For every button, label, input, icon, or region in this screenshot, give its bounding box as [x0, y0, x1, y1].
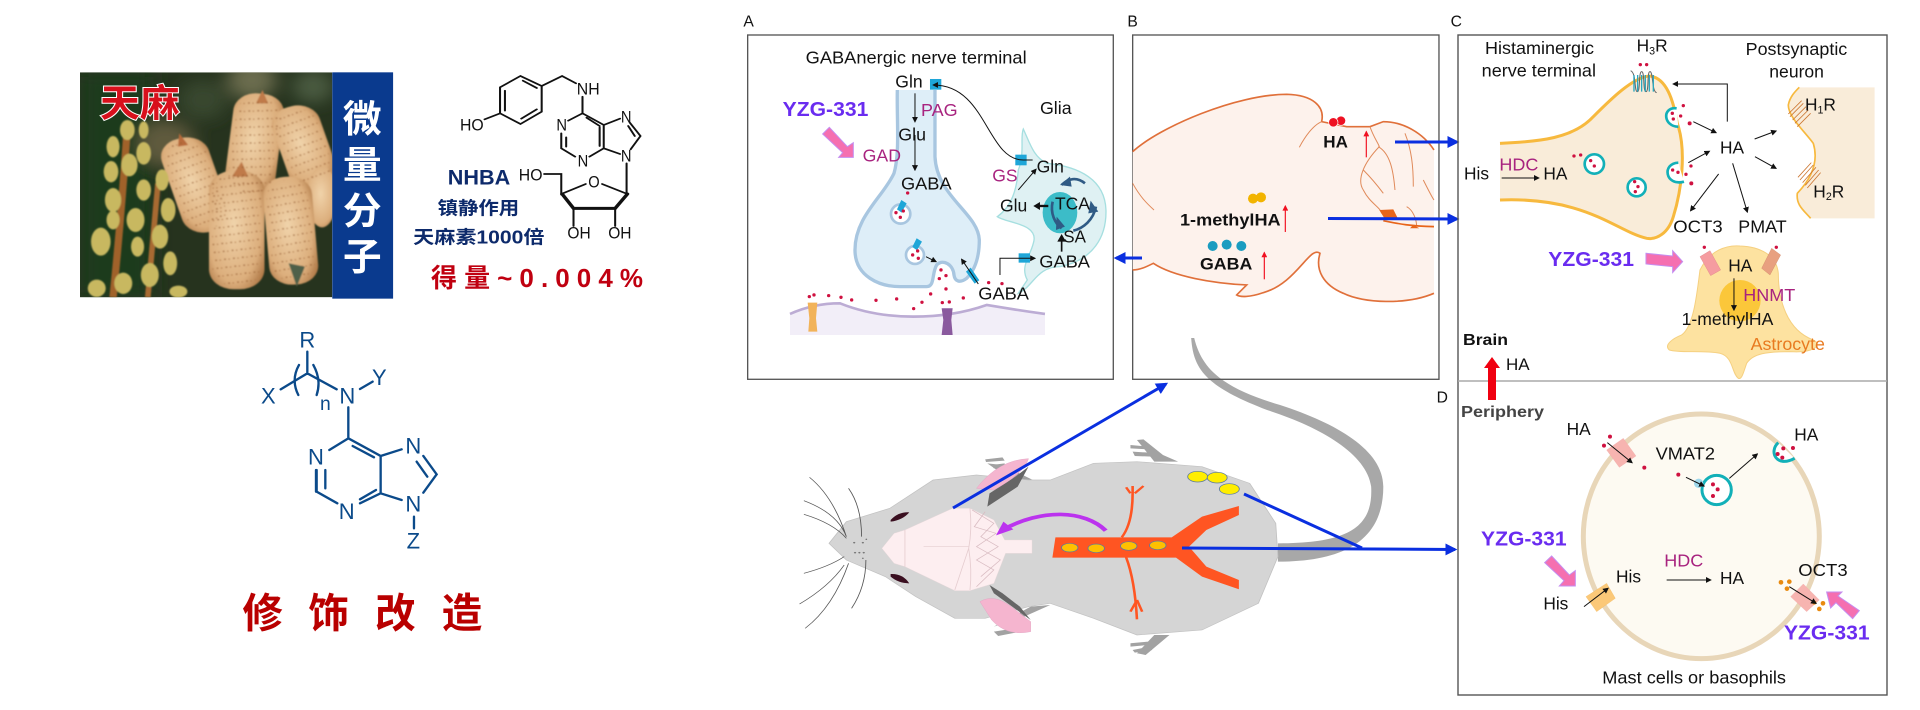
- labels: GABAnergic nerve terminal: [806, 47, 1027, 67]
- labels: SA: [1063, 226, 1086, 246]
- labels: [1543, 419, 1848, 687]
- red increase arrows: [1264, 132, 1366, 279]
- vesicles: [1702, 443, 1795, 505]
- pink arrow: [823, 127, 853, 157]
- labels: HDC: [1664, 551, 1703, 571]
- labels: HDC: [1499, 155, 1538, 175]
- labels: neuron: [1769, 61, 1824, 81]
- text: 修饰改造: [242, 590, 482, 636]
- artery: [1052, 486, 1239, 619]
- chemical structure: modified scaffold: N: [308, 445, 324, 470]
- labels: Glu: [898, 125, 926, 145]
- labels: R: [1832, 181, 1844, 201]
- labels: PAG: [921, 100, 958, 120]
- labels: HNMT: [1743, 285, 1796, 305]
- panel C: histaminergic synapse: [1451, 14, 1875, 379]
- cell: [1583, 414, 1819, 659]
- astrocyte: [1667, 246, 1817, 379]
- paws: [985, 439, 1178, 655]
- label: 天麻: 天麻: [100, 83, 180, 126]
- yellow cells in artery: [1061, 541, 1166, 553]
- labels: GABA: [901, 173, 952, 193]
- chemical structure: NHBA: N: [621, 107, 631, 126]
- chemical structure: modified scaffold: N: [405, 492, 421, 517]
- labels: H: [1637, 36, 1649, 56]
- chemical structure: modified scaffold: Z: [407, 528, 420, 553]
- text: NHBA activity note: 镇静作用: [438, 197, 519, 219]
- labels: 2: [1826, 191, 1832, 203]
- band: 微量分子: 量: [343, 144, 382, 186]
- vesicles: [1585, 108, 1684, 196]
- labels: TCA: [1055, 193, 1090, 213]
- labels: GAD: [863, 145, 901, 165]
- labels: R: [1823, 95, 1836, 115]
- ears: [976, 459, 1031, 633]
- labels: Glia: [1040, 98, 1072, 118]
- labels: Glu: [1000, 195, 1027, 215]
- panel: Gastrodia photo with title band: [80, 60, 393, 299]
- panel D: mast cell: [1437, 390, 1870, 687]
- whiskers: [800, 477, 866, 628]
- chemical structure: NHBA: HO: [519, 165, 542, 184]
- label: Brain / Periphery with red arrow: Periphery: [1461, 404, 1544, 421]
- labels: His: [1543, 593, 1569, 613]
- text: NHBA activity note: [413, 166, 545, 248]
- labels: HA: [1567, 419, 1591, 439]
- labels: 1: [1817, 104, 1823, 116]
- labels: R: [1655, 36, 1668, 56]
- drug label: YZG-331: [783, 98, 868, 121]
- text: 修饰改造: 造: [442, 590, 482, 636]
- text: 修饰改造: 饰: [308, 590, 349, 636]
- labels: HA: [1728, 256, 1753, 276]
- exposed brain: [882, 508, 1032, 591]
- brain section: [1133, 94, 1434, 301]
- terminal outline: [1500, 76, 1682, 239]
- labels: HA: [1543, 163, 1568, 183]
- chemical structure: modified scaffold: [261, 327, 437, 553]
- labels: [806, 47, 1090, 303]
- labels: Histaminergic: [1485, 38, 1594, 58]
- GABAergic neuron terminal: [855, 90, 979, 287]
- labels: OCT3: [1673, 216, 1723, 236]
- band: 微量分子: 分: [343, 190, 382, 232]
- chemical structure: modified scaffold: Y: [372, 365, 387, 390]
- labels: GABA: [978, 283, 1029, 303]
- labels: 3: [1649, 45, 1655, 57]
- panels C and D frame: [1458, 35, 1887, 695]
- labels: HA: [1794, 425, 1819, 445]
- labels: OCT3: [1798, 560, 1848, 580]
- illustration: mouse dissection: [800, 338, 1383, 655]
- vesicles: [891, 204, 924, 264]
- panel B: brain: 1-methylHA: [1180, 210, 1281, 229]
- panel frame: [748, 35, 1113, 379]
- chemical structure: modified scaffold: N: [339, 383, 355, 408]
- label: Brain / Periphery with red arrow: HA: [1506, 355, 1530, 374]
- HA dots: [1572, 63, 1778, 279]
- panel A: GABAergic synapse: [743, 14, 1113, 379]
- labels: nerve terminal: [1482, 61, 1596, 81]
- panel heading letter: D: [1437, 390, 1448, 407]
- reaction arrows: [915, 85, 1066, 284]
- label: Brain / Periphery with red arrow: Brain: [1463, 332, 1508, 349]
- labels: Gln: [895, 72, 923, 92]
- panel frame: [1133, 35, 1439, 379]
- panel heading letter: A: [743, 14, 754, 31]
- H3 receptor: [1631, 71, 1657, 93]
- labels: H: [1805, 95, 1817, 115]
- drug labels: [1481, 528, 1870, 644]
- labels: HA: [1720, 137, 1744, 157]
- chemical structure: modified scaffold: N: [405, 433, 421, 458]
- labels: VMAT2: [1656, 443, 1715, 463]
- transporters: [1586, 438, 1819, 612]
- drug labels: YZG-331: [1481, 528, 1567, 551]
- label: Brain / Periphery with red arrow: [1461, 332, 1544, 421]
- HA dots: [1329, 116, 1346, 127]
- photo: tubers and flower stalks: [80, 60, 342, 298]
- arrows: [1502, 84, 1776, 310]
- pink arrows: [1545, 556, 1859, 619]
- labels: GABA: [1039, 251, 1090, 271]
- eyes: [891, 512, 909, 583]
- 1-methylHA dots: [1248, 192, 1266, 204]
- labels: Astrocyte: [1751, 334, 1825, 354]
- text: yield: 得量~0.004%: [431, 263, 643, 293]
- chemical structure: NHBA: O: [588, 172, 600, 191]
- chemical structure: modified scaffold: X: [261, 383, 276, 408]
- band: 微量分子: 子: [343, 236, 382, 278]
- nose dots: [853, 539, 867, 559]
- chemical structure: NHBA: N: [556, 115, 567, 134]
- labels: His: [1616, 567, 1641, 587]
- GABA dots: [1208, 240, 1246, 251]
- labels: HA: [1720, 568, 1744, 588]
- chemical structure: NHBA: OH: [567, 223, 591, 242]
- HA dots: [1602, 435, 1795, 498]
- text: NHBA activity note: 天麻素1000倍: [413, 226, 545, 248]
- text: 修饰改造: 改: [375, 590, 416, 636]
- tail: [1191, 338, 1383, 562]
- labels: HA: [1323, 132, 1348, 151]
- glia cell: [997, 129, 1106, 293]
- band: 微量分子: [332, 72, 393, 299]
- labels: H: [1813, 181, 1826, 201]
- labels: GS: [992, 165, 1018, 185]
- panel heading letter: B: [1127, 14, 1138, 31]
- chemical structure: modified scaffold: N: [339, 499, 355, 524]
- labels: PMAT: [1738, 216, 1787, 236]
- panel B: brain: GABA: [1200, 254, 1252, 273]
- chemical structure: NHBA: N: [621, 146, 631, 165]
- labels: Mast cells or basophils: [1602, 667, 1786, 687]
- presynaptic terminal: [1500, 76, 1682, 239]
- chemical structure: NHBA: OH: [608, 223, 631, 242]
- text: 修饰改造: 修: [242, 590, 283, 636]
- orange substrate dots: [1779, 579, 1825, 611]
- chemical structure: NHBA: HO: [460, 115, 484, 134]
- panel heading letter: C: [1451, 14, 1462, 31]
- labels: His: [1464, 163, 1489, 183]
- panel B: brain: [1127, 14, 1439, 379]
- yellow cells on body: [1188, 471, 1239, 494]
- chemical structure: NHBA: N: [578, 151, 588, 170]
- body: [829, 462, 1278, 635]
- GABA dots: [808, 191, 1004, 310]
- transporters: [897, 79, 1030, 284]
- arrows: [1584, 443, 1816, 607]
- chemical structure: NHBA: [460, 76, 640, 242]
- purple curved arrow: [996, 514, 1106, 535]
- chemical structure: modified scaffold: n: [320, 394, 331, 415]
- postsynaptic neuron: [1788, 87, 1875, 218]
- drug labels: YZG-331: [1784, 621, 1870, 644]
- text: NHBA activity note: NHBA: [448, 166, 510, 189]
- chemical structure: NHBA: NH: [577, 79, 600, 98]
- postsynaptic membrane: [790, 303, 1045, 335]
- labels: Postsynaptic: [1746, 39, 1848, 59]
- arrow: blue arrows linking panels: [953, 142, 1457, 550]
- drug label: YZG-331: [1548, 248, 1634, 271]
- labels: 1-methylHA: [1682, 309, 1774, 329]
- chemical structure: modified scaffold: R: [299, 327, 315, 352]
- band: 微量分子: 微: [343, 98, 382, 140]
- pink arrow: [1646, 251, 1683, 273]
- labels: Gln: [1037, 157, 1064, 177]
- labels: [1464, 36, 1848, 354]
